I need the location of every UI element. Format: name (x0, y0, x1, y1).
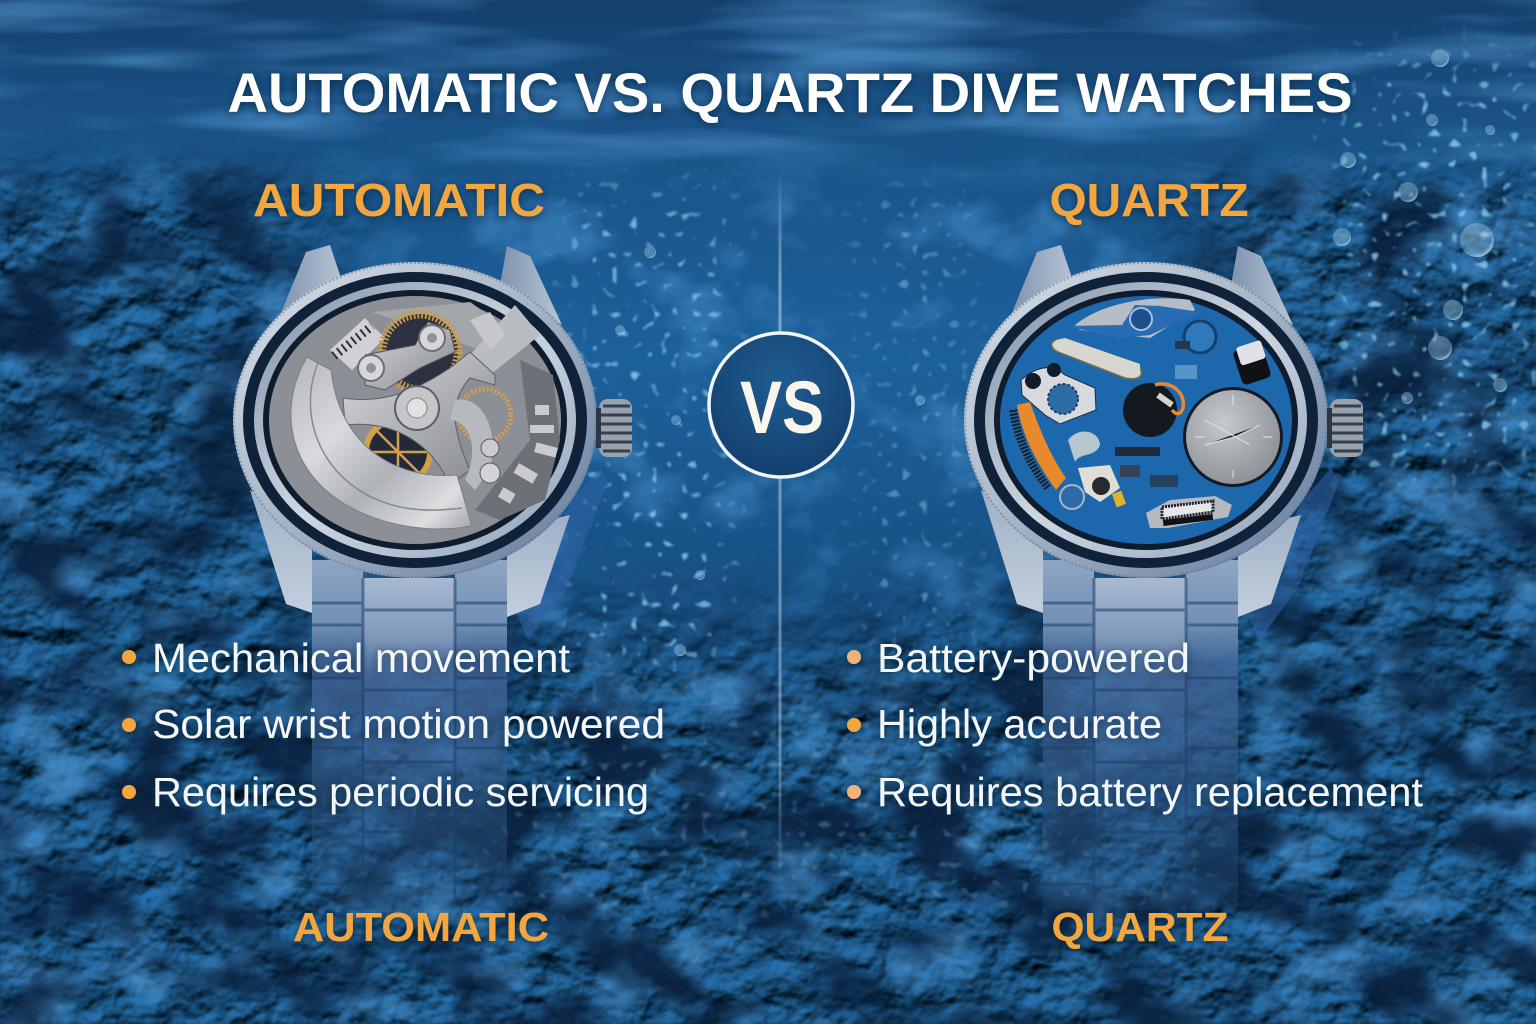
quartz watch (964, 245, 1363, 910)
rotor arm (343, 352, 495, 485)
footer label: quartz: QUARTZ (1052, 904, 1228, 950)
automatic feature list (122, 635, 665, 815)
bridges (365, 322, 455, 390)
VS badge (709, 333, 853, 477)
gears (382, 314, 458, 390)
automatic feature list: Mechanical movement (152, 635, 571, 681)
black cell (1232, 342, 1272, 386)
quartz feature list: Highly accurate (877, 701, 1162, 747)
footer label: automatic: AUTOMATIC (293, 904, 549, 950)
black dial (1123, 383, 1177, 437)
quartz feature list: Requires battery replacement (877, 769, 1424, 815)
connector (1146, 496, 1232, 528)
automatic feature list: Solar wrist motion powered (152, 701, 665, 747)
silver bar (1052, 340, 1141, 379)
heading: quartz: QUARTZ (1050, 174, 1248, 226)
small parts (1068, 432, 1100, 462)
title: AUTOMATIC VS. QUARTZ DIVE WATCHES (228, 61, 1352, 124)
automatic feature list: Requires periodic servicing (152, 769, 649, 815)
battery (1183, 387, 1283, 487)
blue dome (1184, 321, 1216, 353)
centre divider line (778, 170, 782, 890)
rotor (291, 357, 472, 529)
white bridges (1021, 368, 1096, 424)
quartz feature list (847, 635, 1424, 815)
quartz movement (1000, 296, 1292, 544)
automatic watch (233, 245, 632, 910)
heading: automatic: AUTOMATIC (253, 174, 545, 226)
quartz feature list: Battery-powered (877, 635, 1190, 681)
orange coil (1017, 402, 1066, 490)
automatic movement (269, 296, 561, 544)
VS badge: VS (740, 366, 824, 449)
